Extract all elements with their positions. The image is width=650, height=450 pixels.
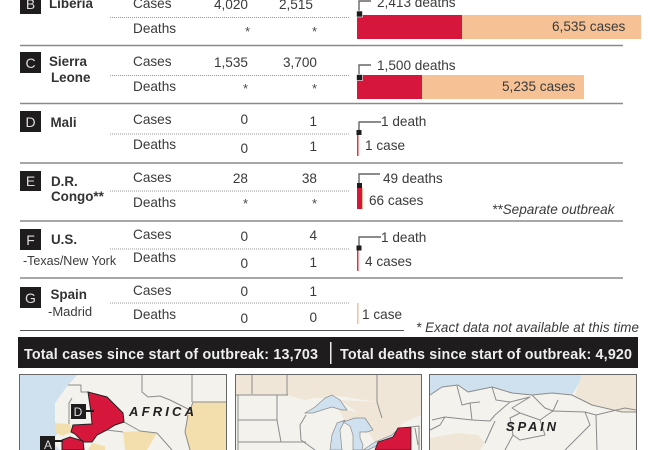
Mali data table: Cases (133, 112, 172, 127)
row: Sierra Leone (20, 52, 584, 99)
row: Liberia (20, 0, 641, 39)
totals banner (18, 337, 638, 368)
badge F: F (26, 232, 35, 248)
Spain data table: Cases (133, 283, 172, 298)
total deaths: Total deaths since start of outbreak: 4,920 (340, 347, 632, 363)
Mali data table: 1 (309, 114, 317, 129)
badge E: E (26, 173, 35, 189)
Spain data table (133, 283, 317, 326)
badge D (20, 111, 41, 132)
Mali data table: 1 (309, 139, 317, 154)
badge F (20, 229, 41, 250)
Spain data table: Deaths (133, 307, 176, 322)
map badge D: D (74, 405, 83, 419)
row: Spain (20, 283, 639, 335)
Spain data table: 0 (309, 310, 317, 325)
Liberia data table: Deaths (133, 21, 176, 36)
U.S. bar chart: 4 cases (365, 254, 412, 269)
Liberia bar chart: 6,535 cases (552, 19, 626, 34)
map badge A (40, 436, 63, 450)
U.S. bar chart (356, 230, 426, 271)
country name: Mali: Mali (50, 115, 77, 130)
D.R. Congo bar chart: 66 cases (369, 193, 424, 208)
badge C: C (25, 55, 36, 71)
Sierra Leone bar chart: 1,500 deaths (377, 58, 456, 73)
D.R. Congo data table: Deaths (133, 195, 176, 210)
country name: U.S. (23, 232, 117, 268)
D.R. Congo data table (133, 170, 317, 211)
row: U.S. (20, 227, 426, 271)
badge C (20, 52, 41, 73)
Spain data table: 0 (240, 284, 248, 299)
badge B (20, 0, 41, 14)
D.R. Congo data table: * (243, 196, 248, 211)
Liberia bar chart (356, 0, 641, 39)
Liberia data table: * (245, 24, 250, 39)
Mali data table: Deaths (133, 137, 176, 152)
row: D.R. Congo (20, 170, 616, 217)
U.S. data table: 4 (309, 228, 317, 243)
Mali data table: 0 (240, 141, 248, 156)
Sierra Leone data table: * (243, 81, 248, 96)
U.S. data table: 0 (240, 229, 248, 244)
Sierra Leone data table (133, 54, 317, 96)
country name: D.R. Congo: Congo** (51, 189, 105, 204)
U.S. bar chart: 1 death (381, 230, 426, 245)
country name: Sierra Leone: Sierra (49, 54, 88, 69)
map: Spain (429, 374, 636, 450)
Spain data table: 0 (240, 311, 248, 326)
U.S. data table: Cases (133, 227, 172, 242)
U.S. data table: 0 (240, 256, 248, 271)
country name: Spain: Spain (50, 287, 87, 302)
Mali bar chart: 1 case (365, 138, 405, 153)
Sierra Leone bar chart: 5,235 cases (502, 79, 576, 94)
map badge D (71, 404, 94, 419)
country name: U.S.: U.S. (51, 232, 77, 247)
country name: D.R. Congo (51, 174, 105, 204)
Spain data table: 1 (309, 284, 317, 299)
badge G (20, 287, 41, 308)
Sierra Leone data table: Deaths (133, 79, 176, 94)
footnote: data not available: * Exact data not available at this time (416, 320, 639, 335)
footnote: separate outbreak: **Separate outbreak (492, 202, 616, 217)
total cases: Total cases since start of outbreak: 13,703 (24, 347, 318, 363)
map: Great Lakes US (235, 374, 422, 450)
country name: D.R. Congo: D.R. (51, 174, 78, 189)
Spain bar chart: 1 case (362, 307, 402, 322)
country name: Spain (48, 287, 92, 319)
Mali bar chart (356, 114, 426, 156)
map label: AFRICA: AFRICA (128, 404, 194, 419)
D.R. Congo bar chart (357, 171, 443, 209)
D.R. Congo data table: 28 (233, 171, 248, 186)
Spain bar chart (357, 303, 402, 324)
Mali data table: 0 (240, 112, 248, 127)
country name: U.S.: -Texas/New York (23, 254, 117, 268)
U.S. data table: 1 (309, 255, 317, 270)
map label: SPAIN: SPAIN (506, 419, 557, 434)
Sierra Leone data table: 3,700 (283, 55, 317, 70)
Sierra Leone data table: Cases (133, 54, 172, 69)
Sierra Leone data table: 1,535 (214, 55, 248, 70)
Liberia data table (133, 0, 317, 39)
badge G: G (25, 290, 36, 306)
map: West Africa (19, 374, 226, 450)
country name: Sierra Leone (49, 54, 90, 85)
Mali bar chart: 1 death (381, 114, 426, 129)
D.R. Congo bar chart: 49 deaths (383, 171, 443, 186)
D.R. Congo data table: 38 (302, 171, 317, 186)
badge E (20, 171, 41, 191)
badge D: D (25, 114, 36, 130)
Sierra Leone bar chart (356, 58, 584, 99)
U.S. data table: Deaths (133, 250, 176, 265)
row: Mali (20, 111, 426, 156)
D.R. Congo data table: Cases (133, 170, 172, 185)
D.R. Congo data table: * (312, 196, 317, 211)
country name: Sierra Leone: Leone (51, 70, 90, 85)
country name: Spain: -Madrid (48, 304, 92, 319)
Sierra Leone data table: * (312, 81, 317, 96)
Mali data table (133, 112, 317, 156)
U.S. data table (133, 227, 317, 271)
Liberia data table: * (312, 24, 317, 39)
